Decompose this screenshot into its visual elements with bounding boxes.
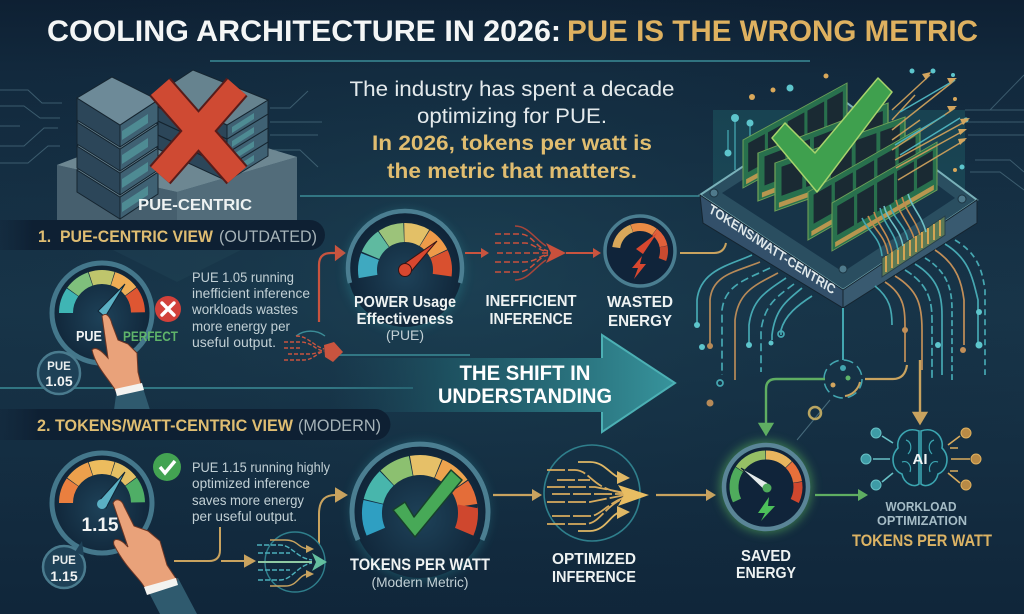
arrow: the shift in understanding: THE SHIFT IN <box>460 362 590 385</box>
gauge: wasted energy: ENERGY <box>608 313 673 330</box>
label: optimized inference <box>552 551 636 586</box>
cables: left bundle <box>694 255 812 406</box>
arrow: hub to saved energy <box>760 379 825 434</box>
gauge: wasted energy <box>605 216 675 330</box>
gauge: tokens per watt: (Modern Metric) <box>372 574 468 590</box>
arrow: red to PUE gauge <box>319 247 344 322</box>
icon: red cross badge <box>155 296 181 322</box>
label: optimized inference: INFERENCE <box>552 569 636 586</box>
gauge: Power Usage Effectiveness: Effectiveness <box>356 311 454 328</box>
label: workload optimization: OPTIMIZATION <box>877 513 967 528</box>
gauge: PUE perfect: PUE <box>76 329 102 345</box>
gauge: saved energy: SAVED <box>741 548 791 565</box>
text: PUE 1.05 explanation: useful output. <box>192 335 276 350</box>
intro text: The industry has spent a decade <box>350 77 674 101</box>
gauge: saved energy: ENERGY <box>736 565 797 582</box>
gauge: PUE 1.15: 1.15 <box>82 515 119 536</box>
heading: tokens/watt-centric view: 2. TOKENS/WATT-CENTRIC VIEW <box>37 416 294 435</box>
badge: PUE 1.05: PUE <box>47 361 71 373</box>
heading: tokens/watt-centric view: (MODERN) <box>298 416 381 435</box>
label: optimized inference: OPTIMIZED <box>552 551 636 568</box>
text: PUE 1.15 explanation: PUE 1.15 running highly <box>192 460 330 475</box>
badge: PUE 1.15: PUE <box>52 555 76 567</box>
text: PUE 1.15 explanation: optimized inference <box>192 476 310 491</box>
arrow: gold to brain <box>914 360 926 423</box>
icon: tokens/watt-centric server board <box>700 68 977 308</box>
heading: PUE-centric view: (OUTDATED) <box>219 227 317 246</box>
gauge: Power Usage Effectiveness <box>345 210 465 343</box>
title <box>47 15 978 48</box>
arrow: gauge to inefficient inference <box>465 248 489 258</box>
arrow: wasted energy to server <box>680 243 726 253</box>
title: COOLING ARCHITECTURE IN 2026: <box>47 15 561 48</box>
intro text: optimizing for PUE. <box>417 104 607 128</box>
text: PUE 1.05 explanation: PUE 1.05 running <box>192 270 294 285</box>
label: workload optimization <box>852 499 992 550</box>
gauge: PUE 1.15 <box>52 453 152 553</box>
icon: AI brain: AI <box>912 451 928 468</box>
text: PUE 1.05 explanation: more energy per <box>192 319 290 334</box>
text: PUE 1.15 explanation <box>192 460 330 524</box>
heading: PUE-centric view: 1. PUE-CENTRIC VIEW <box>38 227 214 246</box>
gauge: Power Usage Effectiveness: POWER Usage <box>354 294 456 311</box>
arrows: text to optimized flow <box>174 489 346 566</box>
badge: PUE 1.15 <box>43 541 85 588</box>
label: workload optimization: TOKENS PER WATT <box>852 532 992 550</box>
icon: big green check mark <box>772 78 892 192</box>
text: PUE 1.15 explanation: saves more energy <box>192 493 304 508</box>
icon: small optimized flow <box>257 532 327 592</box>
title: PUE IS THE WRONG METRIC <box>567 15 978 48</box>
label: inefficient inference <box>486 293 577 328</box>
icon: pointing hand 1 <box>92 314 150 410</box>
output arrows from server <box>892 72 970 180</box>
arrow: gauge to optimized inference <box>493 489 542 501</box>
label: inefficient inference: INEFFICIENT <box>486 293 577 310</box>
badge: PUE 1.15: 1.15 <box>50 568 78 584</box>
icon: small inefficient flow <box>284 331 343 362</box>
icon: green check badge <box>153 453 181 481</box>
icon: pointing hand 2 <box>113 500 197 614</box>
icon: AI brain <box>861 428 981 490</box>
icon: PUE-centric server stack with red X: PUE-CENTRIC <box>138 197 252 214</box>
gauge: tokens per watt <box>350 441 491 590</box>
text: PUE 1.05 explanation: inefficient inference <box>192 286 310 301</box>
intro text <box>350 77 674 183</box>
arrow: optimized to saved energy <box>656 489 716 501</box>
icon: PUE-centric server stack with red X <box>57 70 297 282</box>
arrow: saved energy to AI <box>815 489 868 501</box>
gauge: Power Usage Effectiveness: (PUE) <box>386 327 424 343</box>
connector hub <box>797 308 862 440</box>
icon: optimized inference <box>544 445 649 541</box>
badge: PUE 1.05 <box>38 352 80 394</box>
gauge: wasted energy: WASTED <box>607 294 673 311</box>
text: PUE 1.15 explanation: per useful output. <box>192 509 297 524</box>
label: workload optimization: WORKLOAD <box>886 499 956 514</box>
text: PUE 1.05 explanation <box>191 270 310 350</box>
gauge: tokens per watt: TOKENS PER WATT <box>350 555 491 574</box>
connector: hub to gold cable <box>865 365 907 379</box>
text: PUE 1.05 explanation: workloads wastes <box>191 302 298 317</box>
heading: tokens/watt-centric view <box>0 409 390 440</box>
gauge: saved energy <box>720 441 812 582</box>
gauge: PUE perfect: PERFECT <box>123 328 178 344</box>
intro text: In 2026, tokens per watt is <box>372 132 652 155</box>
arrow: inference to wasted energy <box>566 248 601 258</box>
intro text: the metric that matters. <box>387 160 637 183</box>
label: inefficient inference: INFERENCE <box>490 311 572 328</box>
heading: PUE-centric view <box>0 220 325 250</box>
arrow: the shift in understanding <box>330 335 675 432</box>
icon: tokens/watt-centric server board: TOKENS/WATT-CENTRIC <box>707 201 838 298</box>
arrow: the shift in understanding: UNDERSTANDING <box>438 385 612 408</box>
cables: right bundle <box>875 240 985 380</box>
gauge: PUE perfect <box>52 263 178 363</box>
icon: inefficient inference <box>495 226 566 280</box>
badge: PUE 1.05: 1.05 <box>45 373 73 389</box>
